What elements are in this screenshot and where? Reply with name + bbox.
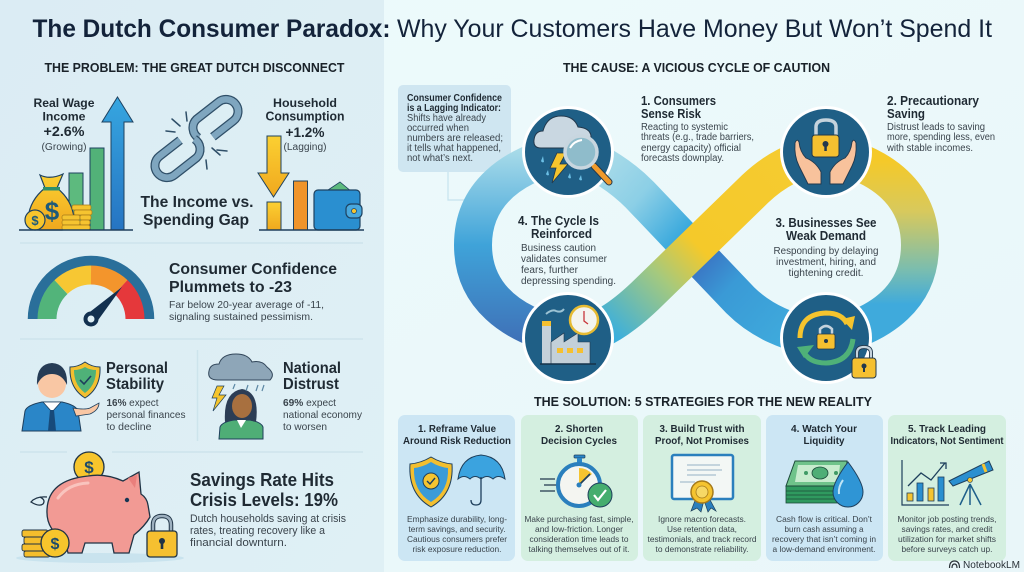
card 1: reframe value: term savings, and security. [408, 524, 506, 534]
card 4: watch your liquidity: 4. Watch Your [791, 423, 857, 435]
text: step 3 businesses see weak demand: tightening credit. [788, 268, 864, 279]
text: consumer confidence [169, 261, 337, 323]
card 2: shorten decision cycles: consideration time leads to [530, 534, 629, 544]
text: step 2 precautionary saving [886, 94, 995, 154]
callout: lagging indicator: it tells what happened, [407, 143, 501, 154]
icon: money bag and coins: $ [45, 196, 60, 226]
panel: the problem [16, 60, 364, 563]
text: step 4 the cycle is reinforced [518, 214, 616, 287]
text: step 3 businesses see weak demand: 3. Businesses See [776, 216, 877, 230]
card 5: track leading indicators: utilization for market shifts [898, 534, 997, 544]
text: step 1 consumers sense risk: 1. Consumers [641, 94, 716, 108]
chart: real wage income rising [19, 97, 133, 230]
icon: money bag and coins: $ [31, 213, 39, 228]
icon: circular arrows around padlock [782, 294, 876, 382]
text: national distrust [283, 360, 363, 433]
card 2: shorten decision cycles: talking themselves out of it. [528, 544, 630, 554]
text: real wage income [34, 96, 95, 153]
icon: hands protecting padlock [782, 108, 870, 196]
text: step 2 precautionary saving: Saving [887, 107, 925, 121]
chart: household consumption lagging [258, 136, 364, 230]
text: consumer confidence: Plummets to -23 [169, 279, 292, 296]
text: national distrust: National [283, 360, 341, 377]
text: savings rate: Savings Rate Hits [190, 470, 334, 490]
text: step 2 precautionary saving: more, spending less, even [887, 132, 995, 143]
icon: broken chain [150, 95, 243, 182]
text: step 4 the cycle is reinforced: 4. The Cycle Is [518, 214, 599, 228]
card 2: shorten decision cycles: 2. Shorten [555, 423, 603, 435]
callout: lagging indicator: Shifts have already [407, 113, 486, 124]
text: step 1 consumers sense risk: threats (e.g., trade barriers, [641, 132, 754, 143]
card 3: build trust with proof: 3. Build Trust with [660, 423, 744, 435]
card 1: reframe value: risk exposure reduction. [412, 544, 502, 554]
diagram: infinity loop ribbon [473, 152, 920, 338]
text: household consumption: (Lagging) [284, 142, 326, 153]
text: step 1 consumers sense risk: forecasts downplay. [641, 153, 724, 164]
callout: lagging indicator: numbers are released; [407, 133, 503, 144]
icon: chart and telescope [902, 460, 993, 505]
icon: worried person under storm cloud [209, 354, 272, 439]
icon: factory and clock [524, 294, 612, 382]
text: savings rate: Dutch households saving at crisis [190, 513, 347, 525]
icon: piggy bank with coins and padlock: $ [51, 536, 60, 553]
card 5: track leading indicators: savings rates, and credit [902, 524, 993, 534]
text: step 1 consumers sense risk: Sense Risk [641, 107, 701, 121]
card 4: watch your liquidity [766, 415, 883, 561]
text: step 4 the cycle is reinforced: depressing spending. [521, 276, 616, 287]
card 3: build trust with proof: to demonstrate reliability. [656, 544, 748, 554]
card 2: shorten decision cycles: Decision Cycles [541, 435, 617, 447]
text: savings rate: Crisis Levels: 19% [190, 490, 338, 510]
title [32, 15, 992, 43]
text: household consumption [266, 96, 344, 153]
heading: the cause: THE CAUSE: A VICIOUS CYCLE OF CAUTION [563, 60, 830, 75]
text: step 2 precautionary saving: Distrust leads to saving [887, 122, 985, 133]
label: income vs spending gap [140, 194, 254, 229]
text: real wage income: +2.6% [44, 123, 85, 139]
text: step 1 consumers sense risk: Reacting to systemic [641, 122, 728, 133]
card 5: track leading indicators: Indicators, Not Sentiment [890, 435, 1004, 447]
callout: lagging indicator: not what’s next. [407, 153, 473, 164]
text: savings rate [190, 470, 347, 549]
text: step 4 the cycle is reinforced: fears, further [521, 265, 579, 276]
text: household consumption: Household [273, 96, 337, 110]
text: national distrust: national economy [283, 409, 363, 421]
text: savings rate: rates, treating recovery like a [190, 525, 325, 537]
text: household consumption: +1.2% [286, 124, 325, 140]
icon: piggy bank with coins and padlock [16, 452, 184, 563]
label: income vs spending gap: Spending Gap [143, 212, 249, 229]
text: personal stability: personal finances [106, 409, 186, 421]
heading: the solution: THE SOLUTION: 5 STRATEGIES FOR THE NEW REALITY [534, 394, 872, 409]
card 4: watch your liquidity: Liquidity [804, 435, 845, 447]
text: real wage income: (Growing) [42, 142, 86, 153]
icon: money bag and coins [25, 174, 92, 230]
card 2: shorten decision cycles [521, 415, 638, 561]
icon: wallet [314, 182, 362, 230]
icon: stopwatch [540, 455, 612, 507]
panel: the cause [398, 60, 995, 382]
callout: lagging indicator [398, 85, 511, 172]
card 5: track leading indicators: 5. Track Leading [908, 423, 986, 435]
text: personal stability [106, 360, 186, 433]
card 5: track leading indicators: before surveys catch up. [902, 544, 992, 554]
icon: piggy bank with coins and padlock: $ [84, 458, 94, 477]
card 3: build trust with proof [643, 415, 761, 561]
icon: businessman with shield [22, 362, 100, 431]
text: step 3 businesses see weak demand: Responding by delaying [774, 246, 878, 257]
text: personal stability: Stability [106, 376, 164, 393]
text: real wage income: Real Wage [34, 96, 95, 110]
card 1: reframe value [398, 415, 515, 561]
text: step 1 consumers sense risk [641, 94, 754, 164]
icon: shield and umbrella [410, 455, 505, 507]
callout: lagging indicator: occurred when [407, 123, 469, 134]
icon: storm cloud and magnifier [524, 108, 612, 196]
text: step 1 consumers sense risk: energy capacity) official [641, 143, 741, 154]
icon: small padlock [852, 347, 876, 378]
card 2: shorten decision cycles: and low-friction. Longer [535, 524, 623, 534]
text: consumer confidence: signaling sustained pessimism. [169, 311, 313, 323]
callout: lagging indicator: is a Lagging Indicator: [407, 103, 501, 114]
text: real wage income: Income [42, 110, 86, 124]
text: step 4 the cycle is reinforced: Business caution [521, 243, 596, 254]
text: consumer confidence: Consumer Confidence [169, 261, 337, 278]
card 1: reframe value: Around Risk Reduction [403, 435, 511, 447]
card 1: reframe value: Emphasize durability, long- [407, 514, 507, 524]
heading: the problem: THE PROBLEM: THE GREAT DUTCH DISCONNECT [44, 60, 345, 75]
label: income vs spending gap: The Income vs. [140, 194, 254, 211]
logo: NotebookLM: NotebookLM [963, 560, 1020, 571]
text: step 3 businesses see weak demand: Weak Demand [786, 229, 866, 243]
card 1: reframe value: Cautious consumers prefer [407, 534, 507, 544]
card 4: watch your liquidity: recovery that isn’t coming in [772, 534, 876, 544]
title: Why Your Customers Have Money But Won’t Spend It [397, 15, 992, 43]
text: national distrust: 69% expect [283, 397, 336, 409]
text: national distrust: Distrust [283, 376, 339, 393]
icon: cash stack and water drop [786, 461, 863, 507]
text: consumer confidence: Far below 20-year average of -11, [169, 299, 324, 311]
card 1: reframe value: 1. Reframe Value [418, 423, 496, 435]
card 4: watch your liquidity: Cash flow is critical. Don’t [776, 514, 873, 524]
card 3: build trust with proof: Ignore macro forecasts. [658, 514, 746, 524]
text: personal stability: 16% expect [106, 397, 159, 409]
card 3: build trust with proof: testimonials, and track record [648, 534, 757, 544]
icon: certificate with seal [672, 455, 733, 512]
text: national distrust: to worsen [283, 421, 327, 433]
card 3: build trust with proof: Use retention data, [667, 524, 737, 534]
text: step 2 precautionary saving: with stable incomes. [886, 143, 973, 154]
panel: the solution [398, 394, 1006, 561]
card 5: track leading indicators: Monitor job posting trends, [898, 514, 996, 524]
text: step 4 the cycle is reinforced: validates consumer [521, 254, 608, 265]
text: step 4 the cycle is reinforced: Reinforced [531, 227, 592, 241]
card 5: track leading indicators [888, 415, 1006, 561]
text: savings rate: financial downturn. [190, 537, 287, 549]
card 3: build trust with proof: Proof, Not Promises [655, 435, 749, 447]
callout: lagging indicator: Consumer Confidence [407, 93, 502, 104]
text: personal stability: to decline [106, 421, 152, 433]
text: step 3 businesses see weak demand: investment, hiring, and [776, 257, 876, 268]
text: personal stability: Personal [106, 360, 168, 377]
card 4: watch your liquidity: burn cash assuming a [784, 524, 864, 534]
card 4: watch your liquidity: a low-demand environment. [772, 544, 876, 554]
chart: consumer confidence gauge [33, 261, 149, 324]
text: step 2 precautionary saving: 2. Precautionary [887, 94, 979, 108]
title: The Dutch Consumer Paradox: [32, 15, 390, 43]
text: step 3 businesses see weak demand [774, 216, 878, 279]
text: household consumption: Consumption [266, 110, 344, 124]
card 2: shorten decision cycles: Make purchasing fast, simple, [524, 514, 634, 524]
